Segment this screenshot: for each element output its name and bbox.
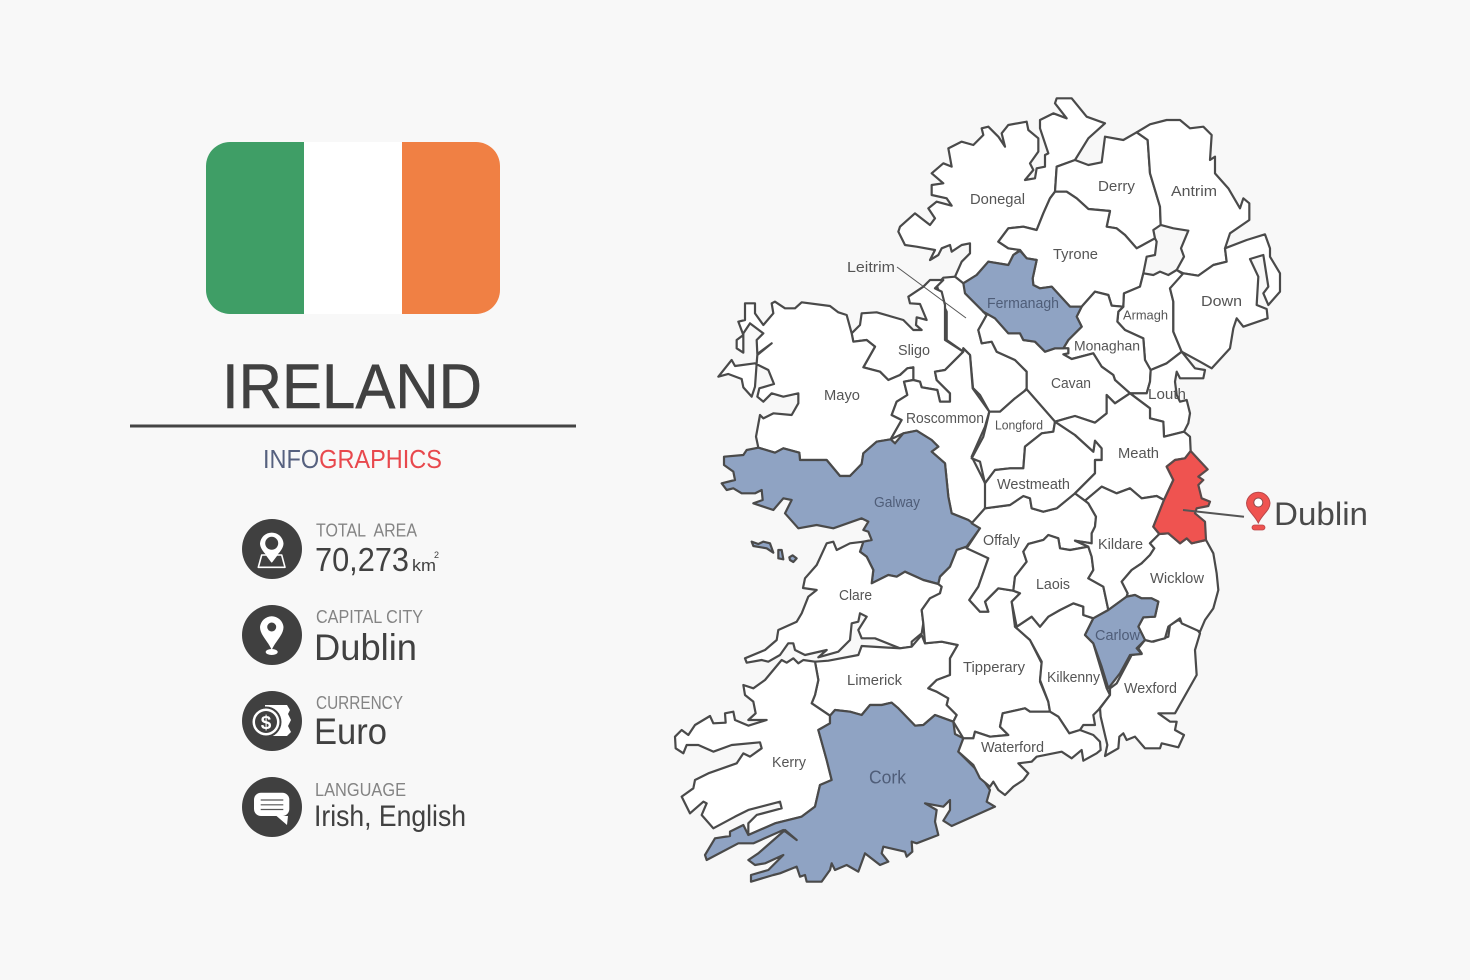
leader line: Leitrim — [897, 267, 966, 318]
county: Kerry — [675, 658, 832, 835]
label: Longford: Longford — [995, 418, 1043, 432]
label: Carlow: Carlow — [1095, 628, 1141, 644]
label: Louth: Louth — [1148, 387, 1186, 403]
southeastern counties — [958, 620, 1200, 795]
eastern counties — [972, 389, 1218, 688]
label: Limerick: Limerick — [847, 673, 903, 689]
label: Donegal: Donegal — [970, 192, 1025, 208]
northern counties — [898, 98, 1280, 393]
label: Antrim: Antrim — [1171, 184, 1217, 200]
callout: Dublin — [1183, 492, 1368, 532]
island: Inishmaan — [778, 550, 783, 559]
county: Dublin — [1153, 451, 1210, 543]
county: Sligo — [852, 280, 963, 402]
label: Armagh: Armagh — [1123, 308, 1168, 322]
label: language: LANGUAGE — [315, 780, 406, 800]
label: Down: Down — [1201, 294, 1242, 310]
value: language: Irish, English — [314, 800, 466, 833]
label: Wicklow: Wicklow — [1150, 571, 1205, 587]
county: Offaly — [967, 493, 1096, 612]
label: Galway: Galway — [874, 495, 921, 511]
icon: location pin — [242, 605, 302, 665]
unit: km squared: km — [412, 556, 436, 575]
county: Waterford — [958, 708, 1101, 795]
label: currency: CURRENCY — [316, 693, 403, 713]
county: Kildare — [1075, 487, 1164, 610]
county group: Fermanagh — [963, 251, 1082, 352]
county: Donegal — [898, 98, 1105, 283]
subtitle: INFOGRAPHICS — [263, 444, 442, 474]
county: Monaghan — [1063, 292, 1151, 393]
label: Monaghan: Monaghan — [1074, 338, 1140, 354]
stat: total area — [242, 519, 439, 579]
icon: speech bubble — [242, 777, 302, 837]
flag of Ireland — [206, 142, 500, 314]
unit: km squared: 2 — [434, 550, 439, 560]
label: Fermanagh: Fermanagh — [987, 296, 1059, 312]
stat: currency — [242, 691, 403, 752]
label: Sligo: Sligo — [898, 343, 930, 359]
icon: pin on map — [242, 519, 302, 579]
county labels — [772, 179, 1242, 788]
label: Kilkenny: Kilkenny — [1047, 670, 1101, 686]
county: Armagh — [1117, 270, 1183, 370]
county: Wexford — [1100, 620, 1200, 756]
label: Roscommon: Roscommon — [906, 411, 984, 427]
county: Wicklow — [1122, 533, 1218, 642]
label: total area: TOTAL AREA — [316, 520, 417, 540]
county: Laois — [1012, 535, 1108, 627]
county: Tipperary — [922, 547, 1050, 738]
county: Westmeath — [985, 422, 1102, 512]
panel: country summary — [130, 142, 576, 837]
county: Fermanagh — [963, 251, 1082, 352]
unit: km squared — [412, 550, 439, 575]
label: Derry: Derry — [1098, 179, 1136, 195]
value: capital city: Dublin — [314, 627, 417, 668]
county: Antrim — [1137, 120, 1249, 276]
county: Cavan — [978, 312, 1130, 423]
icon: coins: $ — [261, 713, 272, 734]
title underline — [130, 424, 576, 428]
leader line: Dublin — [1183, 510, 1244, 517]
label: Cavan: Cavan — [1051, 376, 1091, 392]
label: Laois: Laois — [1036, 577, 1070, 593]
western counties — [718, 280, 989, 584]
county: Louth — [1130, 352, 1205, 437]
county: Galway — [722, 431, 980, 584]
title: IRELAND — [222, 352, 482, 422]
label: Clare: Clare — [839, 588, 872, 604]
value: total area: 70,273 — [315, 541, 409, 578]
label: Westmeath: Westmeath — [997, 477, 1070, 493]
county: Roscommon — [891, 348, 989, 523]
southwestern counties — [675, 635, 995, 882]
icon: coins — [242, 691, 302, 751]
label: Dublin callout: Dublin — [1274, 496, 1368, 532]
stat: capital city — [242, 605, 423, 668]
islands: Aran — [752, 542, 773, 553]
county: Limerick — [812, 635, 958, 726]
label: Cork: Cork — [869, 768, 907, 788]
county: Kilkenny — [1015, 603, 1110, 733]
label: Offaly: Offaly — [983, 533, 1021, 549]
map of Ireland — [675, 98, 1280, 882]
label: Meath: Meath — [1118, 446, 1159, 462]
label: Mayo: Mayo — [824, 388, 860, 404]
label: Waterford: Waterford — [981, 740, 1044, 756]
county: Meath — [1055, 393, 1191, 501]
label: Tyrone: Tyrone — [1053, 247, 1098, 263]
island: Inisheer — [789, 555, 797, 562]
label: Wexford: Wexford — [1124, 681, 1177, 697]
stat: language — [242, 777, 466, 837]
label: capital city: CAPITAL CITY — [316, 607, 423, 627]
county: Mayo — [718, 302, 913, 476]
label: Kerry: Kerry — [772, 755, 807, 771]
county: Cork — [705, 703, 995, 882]
county: Down — [1170, 234, 1280, 368]
county: Tyrone — [998, 192, 1157, 307]
icon: red pin — [1246, 492, 1270, 530]
county: Derry — [1055, 132, 1161, 248]
value: currency: Euro — [314, 711, 387, 752]
label: Kildare: Kildare — [1098, 537, 1143, 553]
county: Leitrim — [937, 277, 1027, 412]
county: Clare — [745, 542, 942, 663]
county: Carlow — [1085, 595, 1158, 688]
county: Longford — [972, 389, 1055, 483]
label: Tipperary: Tipperary — [963, 660, 1026, 676]
label: Leitrim: Leitrim — [847, 260, 895, 276]
